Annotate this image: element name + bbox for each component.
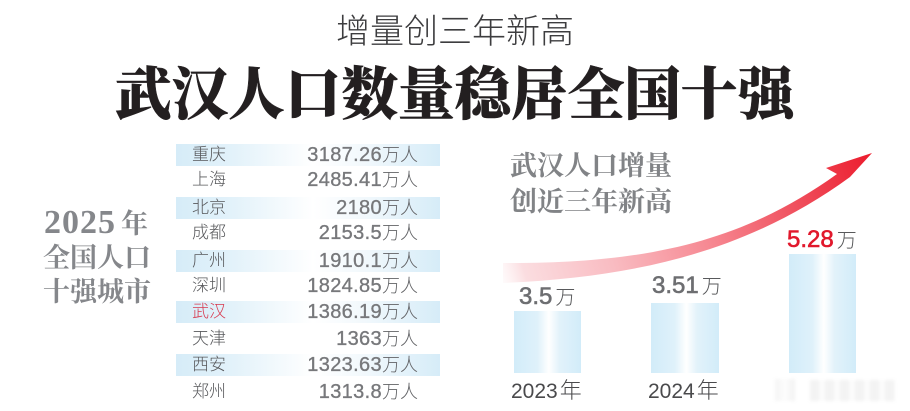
bar: 2024 [651,303,719,373]
row stripe: Beijing [176,197,440,219]
chart heading: Wuhan growth three-year high [510,151,672,217]
value label: 2025: 5.28万 [787,226,857,253]
heading line: top ten cities: 十强城市 [43,277,151,307]
city name: Zhengzhou: 郑州 [192,382,226,401]
watermark [790,380,894,400]
main title: 武汉人口数量稳居全国十强 [115,65,794,127]
chart heading line 2: 创近三年新高 [510,187,672,217]
population: Shenzhen: 1824.85万人 [307,275,418,297]
row stripe: Xi'an [176,354,440,376]
population: Chengdu: 2153.5万人 [319,222,418,244]
value label: 2023: 3.5万 [519,283,575,310]
population: Beijing: 2180万人 [336,197,418,219]
value label: 2024: 3.51万 [652,272,722,299]
subtitle: 增量创三年新高 [336,13,574,51]
population: Tianjin: 1363万人 [336,328,418,350]
city name: Beijing: 北京 [192,198,226,217]
city name: Xi'an: 西安 [192,355,226,374]
bar chart: yearly population increase [514,254,856,373]
watermark text block [810,380,896,401]
city name: Tianjin: 天津 [192,329,226,348]
watermark mark [775,379,795,401]
year label: 2023: 2023年 [511,378,582,403]
city name: Guangzhou: 广州 [192,251,226,270]
population: Xi'an: 1323.63万人 [307,354,418,376]
city name: Wuhan (highlighted): 武汉 [192,302,226,321]
chart heading line 1: 武汉人口增量 [510,151,672,181]
row stripe: Chongqing [176,144,440,166]
population: Wuhan: 1386.19万人 [307,301,418,323]
population: Zhengzhou: 1313.8万人 [319,381,418,403]
heading line: year: 2025年 [44,204,149,241]
city name: Shanghai: 上海 [192,170,226,189]
population: Chongqing: 3187.26万人 [307,144,418,166]
year label: 2024: 2024年 [648,378,719,403]
city name: Shenzhen: 深圳 [192,276,226,295]
side heading: 2025 national top ten cities [43,204,151,307]
population: Shanghai: 2485.41万人 [307,169,418,191]
heading line: national population: 全国人口 [43,243,151,273]
panel: city ranking table [176,144,440,376]
city name: Chongqing: 重庆 [192,145,226,164]
city name: Chengdu: 成都 [192,223,226,242]
row stripe: Wuhan [176,301,440,323]
bar: 2025 [789,254,856,373]
population: Guangzhou: 1910.1万人 [319,250,418,272]
bar: 2023 [514,311,581,373]
row stripe: Guangzhou [176,250,440,272]
